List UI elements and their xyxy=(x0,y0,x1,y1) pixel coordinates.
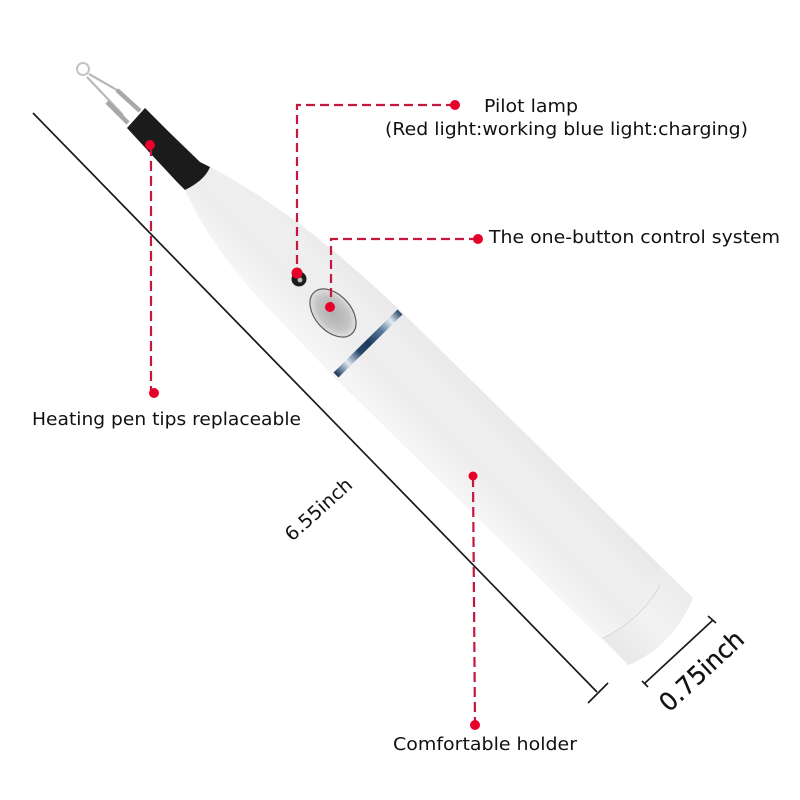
pen body xyxy=(185,167,693,665)
callout: pen tips leader xyxy=(145,140,159,398)
pen tip loop xyxy=(77,63,140,123)
label: comfortable holder: Comfortable holder xyxy=(393,734,578,755)
label: one-button control: The one-button control system xyxy=(488,227,780,248)
pilot lamp xyxy=(292,272,306,286)
icon: pen device xyxy=(77,63,693,665)
light ring xyxy=(336,312,400,375)
label: pilot lamp: Pilot lamp xyxy=(484,96,578,117)
black collar xyxy=(127,108,210,190)
label: light status: (Red light:working blue light:charging) xyxy=(385,119,748,140)
callout: control button leader xyxy=(325,234,483,312)
callout: holder leader xyxy=(468,472,480,730)
dimension line: pen length xyxy=(33,113,608,703)
callout: pilot lamp leader xyxy=(292,100,460,278)
end cap xyxy=(603,567,693,665)
label: heating pen tips: Heating pen tips replaceable xyxy=(32,409,301,430)
control button xyxy=(301,280,365,346)
label: pen width: 0.75inch xyxy=(653,625,750,717)
label: pen length: 6.55inch xyxy=(281,474,357,546)
dimension line: pen width xyxy=(642,616,716,687)
